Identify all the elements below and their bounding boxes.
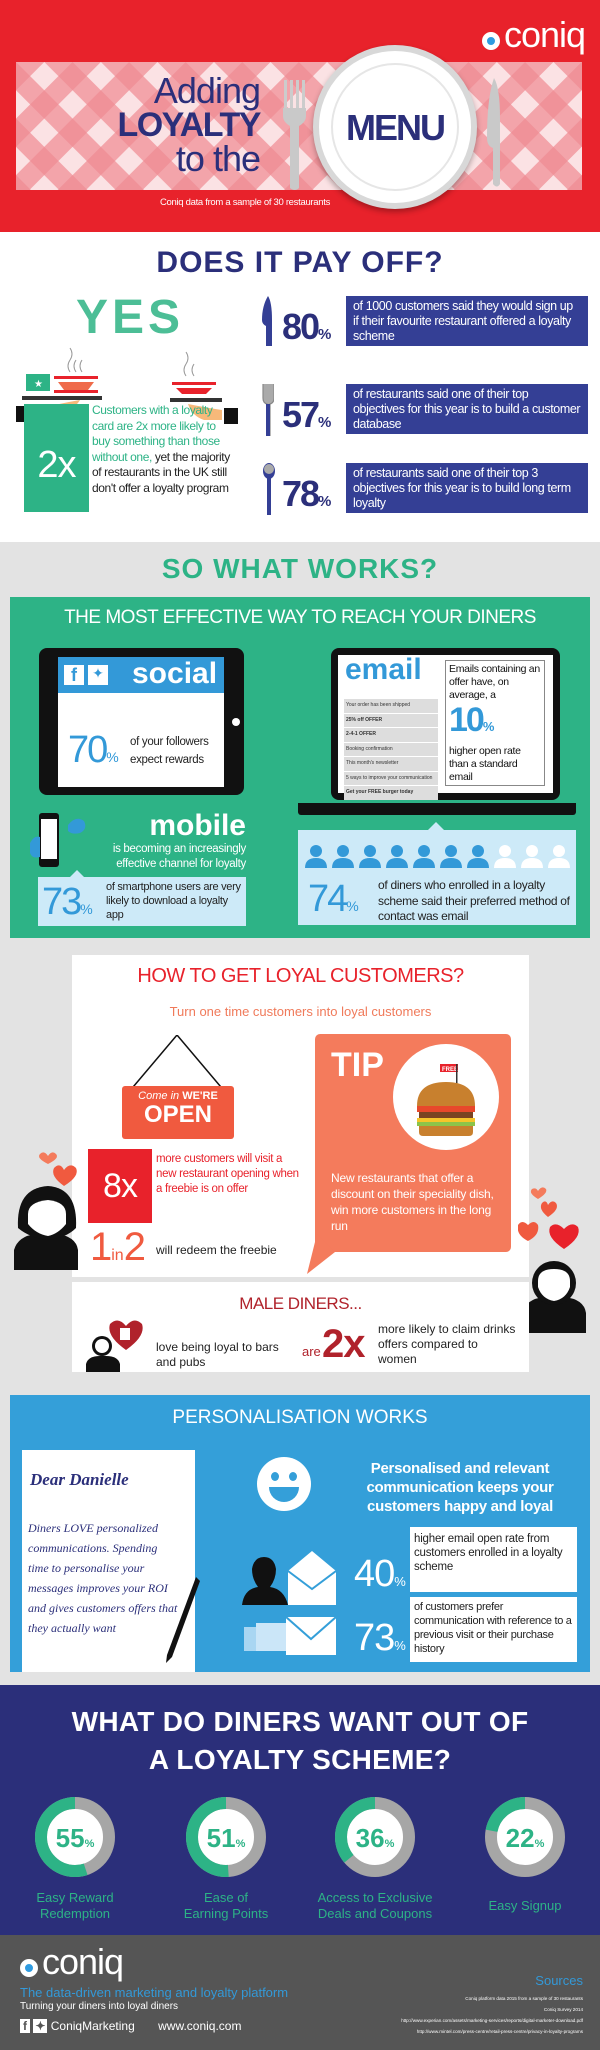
section: does it pay off — [0, 232, 600, 542]
icon: pen — [166, 1577, 200, 1663]
2x stat: are — [302, 1344, 321, 1359]
stat 78% — [263, 463, 588, 515]
mobile text: mobile — [149, 809, 246, 842]
donut: 36%: Access to Exclusive Deals and Coupons — [318, 1890, 432, 1921]
donut: 51%: Ease of — [204, 1890, 248, 1905]
donut: 36%: 36% — [356, 1823, 395, 1853]
title text — [117, 70, 261, 179]
laptop: email — [298, 648, 576, 815]
panel: male diners: love being loyal to bars — [156, 1340, 279, 1354]
icon: man with hearts — [518, 1187, 586, 1333]
stat 80% — [262, 296, 588, 347]
sources: Coniq Survey 2014 — [544, 2007, 583, 2012]
icon: trays and hands: ★ — [34, 379, 43, 390]
icon: knife — [487, 78, 500, 186]
footer — [0, 1935, 600, 2050]
sources — [401, 1973, 584, 2034]
stat 40%: 40% — [354, 1553, 405, 1595]
callout: 74% email — [298, 830, 576, 925]
stat 40%: higher email open rate from customers enrolled in a loyalty scheme — [414, 1533, 562, 1573]
section: what do diners want — [0, 1685, 600, 1935]
stat 57%: of restaurants said one of their top objectives for this year is to build a customer database — [353, 387, 580, 431]
icon: facebook twitter: f — [71, 665, 77, 685]
icon: trays and hands — [16, 348, 238, 424]
2x description: Customers with a loyalty card are 2x more likely to buy something than those without one, yet the majority of restaurants in the UK still don't offer a loyalty program — [92, 403, 230, 494]
icon: open sign: Come in WE'RE — [138, 1090, 218, 1102]
stat 80%: 80% — [282, 306, 329, 347]
stat 57%: 57% — [282, 394, 329, 435]
stat 73% — [244, 1597, 577, 1662]
letter note: Dear Danielle — [30, 1470, 129, 1489]
heading: DOES IT PAY OFF? — [156, 246, 444, 279]
heading: HOW TO GET LOYAL CUSTOMERS? — [137, 965, 464, 987]
title text: LOYALTY — [117, 106, 260, 144]
tip speech bubble: TIP — [331, 1046, 384, 1084]
donut: 51%: Earning Points — [184, 1906, 268, 1921]
heading: WHAT DO DINERS WANT OUT OF — [72, 1706, 528, 1737]
icon: woman with hearts — [14, 1152, 78, 1270]
panel: how to get loyal customers: more customers will visit a new restaurant opening when a freebie is on offer — [156, 1153, 299, 1195]
sources: http://www.experian.com/assets/marketing-services/reports/digital-marketer-download.pdf — [401, 2018, 583, 2023]
heading: PERSONALISATION WORKS — [172, 1407, 428, 1428]
title text: Adding — [154, 70, 260, 111]
icon: burger: FREE — [442, 1067, 458, 1073]
icon: facebook twitter — [64, 665, 108, 685]
1 in 2 stat — [90, 1225, 277, 1269]
icon: facebook twitter: ✦ — [92, 665, 104, 681]
panel: how to get loyal customers — [72, 955, 529, 1277]
1 in 2 stat: will redeem the freebie — [156, 1243, 277, 1257]
icon: man with heart mug — [86, 1320, 143, 1372]
2x stat — [302, 1322, 515, 1366]
YES: YES — [76, 291, 184, 344]
donut: 22%: 22% — [506, 1823, 545, 1853]
icon: open sign: OPEN — [144, 1101, 212, 1128]
icon: smiley — [257, 1457, 311, 1511]
donut: 55% — [35, 1797, 115, 1921]
panel: male diners: and pubs — [156, 1355, 205, 1369]
panel: most effective way — [10, 597, 590, 938]
stat 73%: 73% — [354, 1617, 405, 1659]
donut: 55%: 55% — [56, 1823, 95, 1853]
title text: to the — [176, 138, 260, 179]
callout: 73% mobile — [38, 877, 246, 926]
stat 57% — [262, 384, 588, 436]
laptop: email: Booking confirmation — [346, 746, 393, 752]
stat 40% — [242, 1527, 577, 1605]
callout: 73% mobile: 73% — [42, 881, 91, 923]
plate with MENU: MENU — [346, 107, 444, 148]
donut: 36% — [318, 1797, 432, 1921]
sources: Sources — [535, 1973, 583, 1988]
laptop: email: Get your FREE burger today — [346, 789, 413, 795]
panel heading: THE MOST EFFECTIVE WAY TO REACH YOUR DINERS — [64, 607, 536, 628]
laptop: email: email — [345, 653, 422, 686]
header banner — [0, 0, 600, 232]
stat 78%: of restaurants said one of their top 3 objectives for this year is to build long term loyalty — [353, 466, 571, 510]
laptop: email: This month's newsletter — [346, 760, 398, 766]
heading: A LOYALTY SCHEME? — [149, 1744, 451, 1775]
laptop: email: 5 ways to improve your communication — [346, 774, 432, 780]
callout: 73% mobile: of smartphone users are very likely to download a loyalty app — [106, 881, 241, 921]
subheading: Turn one time customers into loyal customers — [170, 1004, 431, 1019]
plate with MENU — [313, 45, 477, 209]
mobile text — [113, 809, 246, 870]
logo: coniq — [504, 14, 585, 55]
1 in 2 stat: 1in2 — [90, 1225, 146, 1269]
stat 73%: of customers prefer communication with reference to a previous visit or their purchase history — [414, 1601, 572, 1655]
stat 78%: 78% — [282, 473, 329, 514]
laptop: email: 10% — [449, 701, 492, 739]
donut: 22%: Easy Signup — [488, 1898, 562, 1913]
footer: Turning your diners into loyal diners — [20, 2001, 178, 2012]
donut: 51% — [184, 1797, 268, 1921]
heading: MALE DINERS... — [239, 1294, 362, 1313]
2x stat box: 2x — [37, 444, 76, 486]
stat 80%: of 1000 customers said they would sign up if their favourite restaurant offered a loyalty scheme — [353, 299, 573, 343]
2x stat box — [24, 404, 89, 512]
sources: http://www.mintel.com/press-centre/retail-press-centre/privacy-in-loyalty-programs — [417, 2029, 583, 2034]
tablet: social: expect rewards — [130, 754, 204, 766]
icon: open sign — [122, 1035, 234, 1139]
tablet: social: 70% — [68, 729, 117, 771]
icon: fork — [283, 80, 306, 190]
tip speech bubble: New restaurants that offer a discount on their speciality dish, win more customers in the long run — [331, 1171, 494, 1233]
letter note — [22, 1450, 195, 1672]
sources: Coniq platform data 2015 from a sample of 30 restaurants — [465, 1996, 583, 2001]
tip speech bubble — [315, 1034, 511, 1252]
laptop: email: Your order has been shipped — [346, 702, 410, 708]
icon: burger — [393, 1044, 499, 1150]
footer logo: coniq — [42, 1941, 123, 1982]
donut: 51%: 51% — [207, 1823, 246, 1853]
donut: 55%: Easy Reward Redemption — [36, 1890, 114, 1921]
checkered tablecloth band — [16, 62, 582, 190]
2x stat: 2x — [322, 1322, 364, 1366]
laptop: email: 25% off OFFER — [346, 716, 382, 722]
icon: people row — [305, 845, 570, 868]
callout: 74% email: of diners who enrolled in a loyalty scheme said their preferred method of contact was email — [378, 878, 570, 923]
subtitle: Coniq data from a sample of 30 restaurants — [160, 197, 330, 208]
2x stat: more likely to claim drinks offers compared to women — [378, 1322, 515, 1366]
letter note: Diners LOVE personalized communications. Spending time to personalise your messages improves your ROI and gives customers offers that they actually want — [28, 1521, 177, 1635]
laptop: email: 2-4-1 OFFER — [346, 731, 376, 737]
tagline: Personalised and relevant communication keeps your customers happy and loyal — [366, 1460, 554, 1515]
heading: so what works: SO WHAT WORKS? — [162, 553, 438, 584]
mobile text: is becoming an increasingly effective channel for loyalty — [113, 843, 246, 870]
8x stat: 8x — [103, 1167, 137, 1205]
tablet: social: of your followers — [130, 736, 209, 748]
panel: male diners — [72, 1282, 529, 1372]
tablet: social: social — [132, 657, 217, 690]
footer tagline: The data-driven marketing and loyalty platform — [20, 1985, 288, 2000]
social links: f ✦ ConiqMarketing www.coniq.com — [23, 2019, 241, 2033]
panel: personalisation works — [10, 1395, 590, 1672]
laptop: email: Emails containing an offer have, on average, a higher open rate than a standard email — [449, 663, 540, 783]
heading — [72, 1706, 528, 1775]
callout: 74% email: 74% — [308, 878, 357, 920]
tablet: social — [39, 648, 244, 795]
donut: 22% — [485, 1797, 565, 1913]
icon: phone with arm — [30, 813, 86, 867]
8x stat — [88, 1149, 152, 1223]
